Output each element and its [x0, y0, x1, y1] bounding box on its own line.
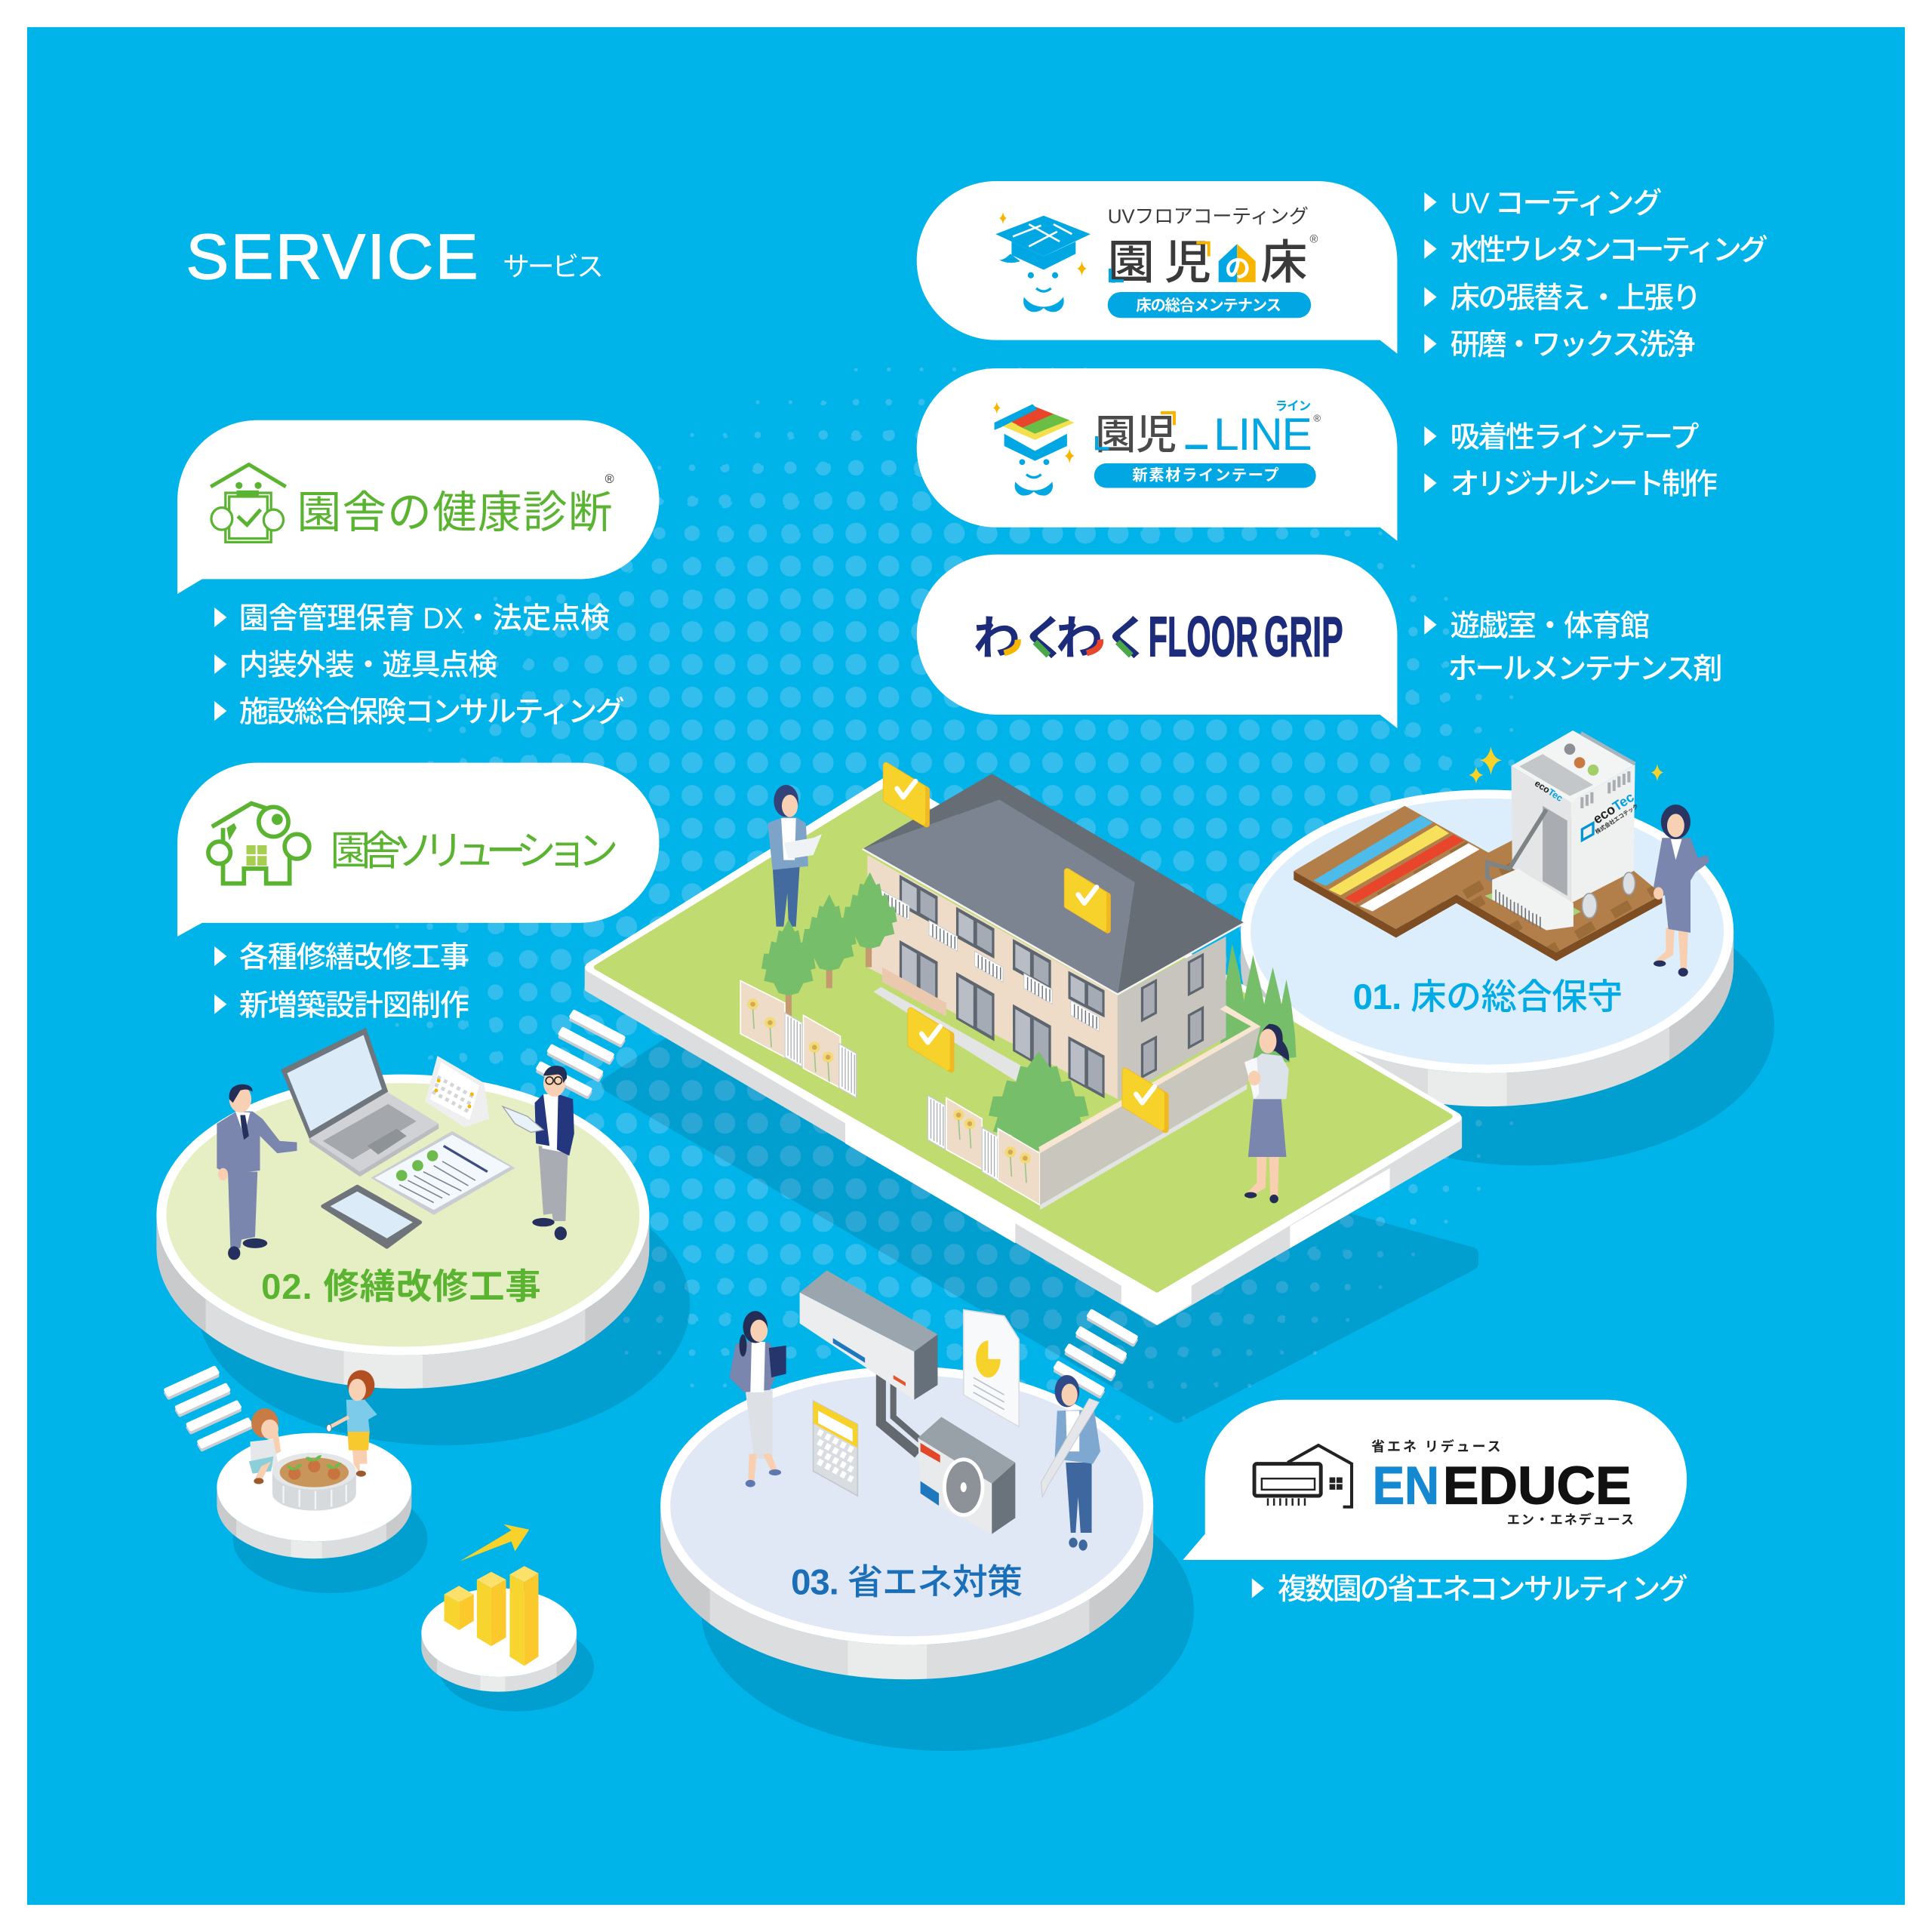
brick planter — [882, 968, 946, 1017]
halftone dots background — [382, 357, 1564, 1461]
title: サービス — [503, 251, 604, 282]
list: 健康診断 services: 内装外装・遊具点検 — [239, 650, 498, 682]
disc 01: floor maintenance — [1241, 731, 1734, 1106]
label: 03: 03. 省エネ対策 — [791, 1563, 1023, 1603]
main platform with house — [586, 765, 1460, 1324]
yellow check badges — [886, 765, 1165, 1130]
bubble: 園児LINE — [917, 368, 1397, 541]
small disc: children with planter — [217, 1371, 411, 1558]
logo wordmark — [974, 605, 1343, 668]
logo wordmark: 園舎ソリューション — [331, 829, 619, 874]
child sitting — [249, 1408, 281, 1484]
laptop — [281, 1028, 438, 1177]
air conditioner indoor unit — [800, 1270, 937, 1454]
clipboard document — [371, 1131, 515, 1215]
icon: graduate mascot — [995, 212, 1091, 312]
cleaning machine: ecoTec — [1533, 778, 1564, 804]
smartphone — [323, 1186, 420, 1247]
icon: house clipboard — [211, 465, 286, 542]
logo wordmark: EDUCE — [1443, 1456, 1632, 1515]
logo subtitle: UVフロアコーティング — [1108, 205, 1309, 228]
logo wordmark: ® — [1313, 412, 1321, 423]
label: 02: 02. 修繕改修工事 — [261, 1267, 541, 1307]
person: woman with clipboard — [1244, 1024, 1289, 1203]
front trees — [761, 872, 897, 1017]
shadows of platforms — [197, 884, 1774, 1751]
registered mark: ® — [605, 472, 614, 486]
logo wordmark: FLOOR — [1149, 605, 1258, 668]
bubble: ENEDUCE — [1183, 1400, 1687, 1560]
icon: AC house — [1254, 1445, 1352, 1507]
bush — [989, 1051, 1089, 1151]
icon: house with magnifier — [208, 803, 309, 884]
list: FLOOR GRIP services: ホールメンテナンス剤 — [1447, 654, 1722, 686]
growth arrow — [460, 1524, 529, 1561]
machine brand text: ecoTec — [1590, 789, 1637, 827]
list: 園児の床 services: UV コーティング — [1451, 187, 1662, 220]
list: ソリューション services: 各種修繕改修工事 — [239, 942, 469, 974]
label: 01: 01. 床の総合保守 — [1353, 977, 1623, 1017]
bubble: FLOOR GRIP — [917, 555, 1397, 728]
logo pill — [1108, 292, 1311, 318]
stepping stones — [166, 1011, 1136, 1450]
long garden wall — [998, 1005, 1260, 1210]
list: 園児の床 services: 研磨・ワックス洗浄 — [1451, 329, 1696, 361]
list: 園児の床 services: 水性ウレタンコーティング — [1451, 234, 1768, 266]
list: 園児の床 services: 床の張替え・上張り — [1451, 282, 1702, 315]
logo wordmark: ライン — [1275, 400, 1311, 414]
logo pill: 新素材ラインテープ — [1132, 467, 1279, 485]
list: 園児LINE services: 吸着性ラインテープ — [1451, 422, 1699, 454]
list: ソリューション services — [214, 942, 469, 1022]
house — [863, 774, 1244, 1099]
person: man with glasses — [503, 1066, 574, 1240]
calendar — [425, 1056, 489, 1128]
logo wordmark: わくわく — [974, 613, 1151, 665]
small disc: bar chart — [421, 1524, 577, 1692]
entry slab — [874, 987, 1041, 1087]
list: 健康診断 services: 施設総合保険コンサルティング — [239, 697, 625, 729]
logo wordmark: の — [1225, 254, 1251, 283]
platform base — [586, 780, 1460, 1324]
title — [186, 220, 604, 292]
side wall windows — [1142, 955, 1202, 1077]
logo wordmark: 省エネ リデュース — [1371, 1438, 1501, 1454]
logo wordmark: GRIP — [1264, 605, 1343, 668]
child standing — [327, 1371, 377, 1477]
list: 園児LINE services — [1424, 422, 1718, 501]
list: 健康診断 services — [214, 603, 625, 729]
logo wordmark: 園舎の健康診断 — [297, 488, 612, 537]
pines — [1220, 944, 1297, 1062]
logo wordmark: エン・エネデュース — [1507, 1512, 1634, 1527]
person: businesswoman — [1654, 804, 1709, 977]
logo wordmark — [1371, 1438, 1634, 1527]
document with pie chart — [964, 1310, 1019, 1427]
bubble: 園舎ソリューション — [177, 763, 659, 937]
list: ソリューション services: 新増築設計図制作 — [239, 989, 469, 1022]
bubble: 園児の床 — [917, 181, 1397, 354]
list: FLOOR GRIP services: 遊戯室・体育館 — [1451, 610, 1650, 642]
air conditioner outdoor unit — [918, 1417, 1015, 1534]
list: 健康診断 services: 園舎管理保育 DX・法定点検 — [239, 603, 610, 635]
icon: graduate mascot with stripes — [993, 401, 1075, 496]
list: FLOOR GRIP services — [1424, 610, 1722, 686]
sparkles — [1469, 746, 1663, 783]
disc 02: repair works — [156, 1028, 649, 1389]
list: 園児LINE services: オリジナルシート制作 — [1451, 469, 1718, 501]
disc 03: energy saving — [660, 1270, 1153, 1679]
person: woman with pencil — [1041, 1375, 1100, 1551]
logo wordmark: 床 — [1260, 237, 1307, 289]
wood floor — [1294, 806, 1662, 961]
cleaning machine: 株式会社エコテック — [1594, 803, 1639, 835]
balconies — [881, 890, 1099, 1032]
roof — [863, 774, 1244, 995]
logo wordmark — [1108, 234, 1318, 289]
logo wordmark: LINE — [1214, 408, 1312, 460]
yellow bars — [445, 1566, 538, 1666]
calculator — [814, 1401, 857, 1496]
cleaning machine — [1487, 731, 1639, 931]
logo pill — [1094, 463, 1316, 488]
logo wordmark: 園児 — [1095, 412, 1177, 457]
windows — [900, 875, 1105, 1098]
logo pill: 床の総合メンテナンス — [1136, 297, 1281, 314]
logo wordmark: EN — [1373, 1456, 1439, 1515]
title: SERVICE — [186, 220, 478, 292]
logo wordmark — [1095, 400, 1321, 460]
logo wordmark: 園児 — [1108, 237, 1211, 289]
logo wordmark: ® — [1310, 234, 1318, 246]
bubble: 園舎の健康診断 — [177, 420, 659, 594]
planter with sprouts — [272, 1453, 356, 1511]
list: ENEDUCE services: 複数園の省エネコンサルティング — [1278, 1574, 1688, 1606]
person: woman with paper — [768, 785, 822, 927]
person: woman with folder — [730, 1311, 786, 1487]
list: 園児の床 services — [1424, 187, 1768, 361]
tree behind garden wall — [802, 894, 857, 988]
person: man in suit — [217, 1084, 297, 1260]
garden walls and fences — [740, 981, 999, 1182]
